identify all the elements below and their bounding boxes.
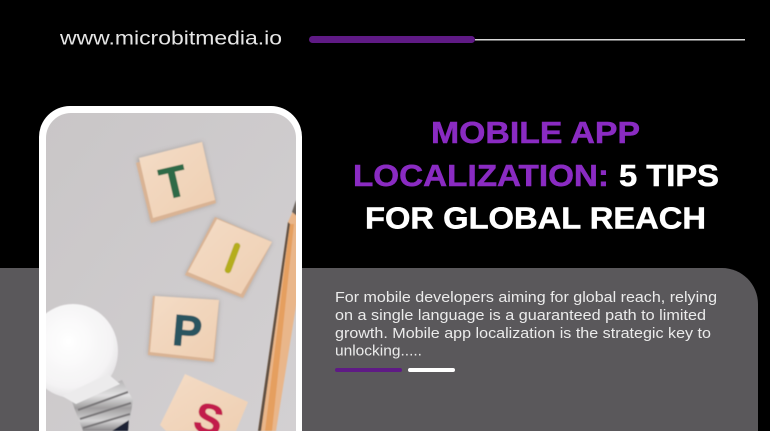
block S xyxy=(160,374,248,431)
light bulb xyxy=(46,304,132,431)
body text xyxy=(335,290,717,360)
photo xyxy=(28,113,297,431)
block P xyxy=(148,296,219,362)
title line 2 xyxy=(353,159,719,193)
title line 3: FOR GLOBAL REACH xyxy=(365,202,706,236)
card white frame xyxy=(39,106,302,431)
title xyxy=(353,116,719,236)
panel: grey description panel xyxy=(0,268,758,431)
block T: T xyxy=(155,156,192,210)
block T xyxy=(136,142,216,223)
title line 1: MOBILE APP xyxy=(431,116,640,150)
body text: on a single language is a guaranteed path to limited xyxy=(335,308,706,324)
title line 2: 5 TIPS xyxy=(619,159,719,193)
website url: www.microbitmedia.io xyxy=(59,28,282,50)
body text: unlocking..... xyxy=(335,344,422,360)
accent bars xyxy=(335,368,455,372)
block P: P xyxy=(171,306,204,357)
block I xyxy=(185,217,272,298)
header rule xyxy=(309,36,745,43)
photo card: tips blocks xyxy=(28,106,302,431)
title line 2: LOCALIZATION: xyxy=(353,159,609,193)
body text: For mobile developers aiming for global reach, relying xyxy=(335,290,717,306)
pencil xyxy=(258,200,297,431)
body text: growth. Mobile app localization is the strategic key to xyxy=(335,326,711,342)
